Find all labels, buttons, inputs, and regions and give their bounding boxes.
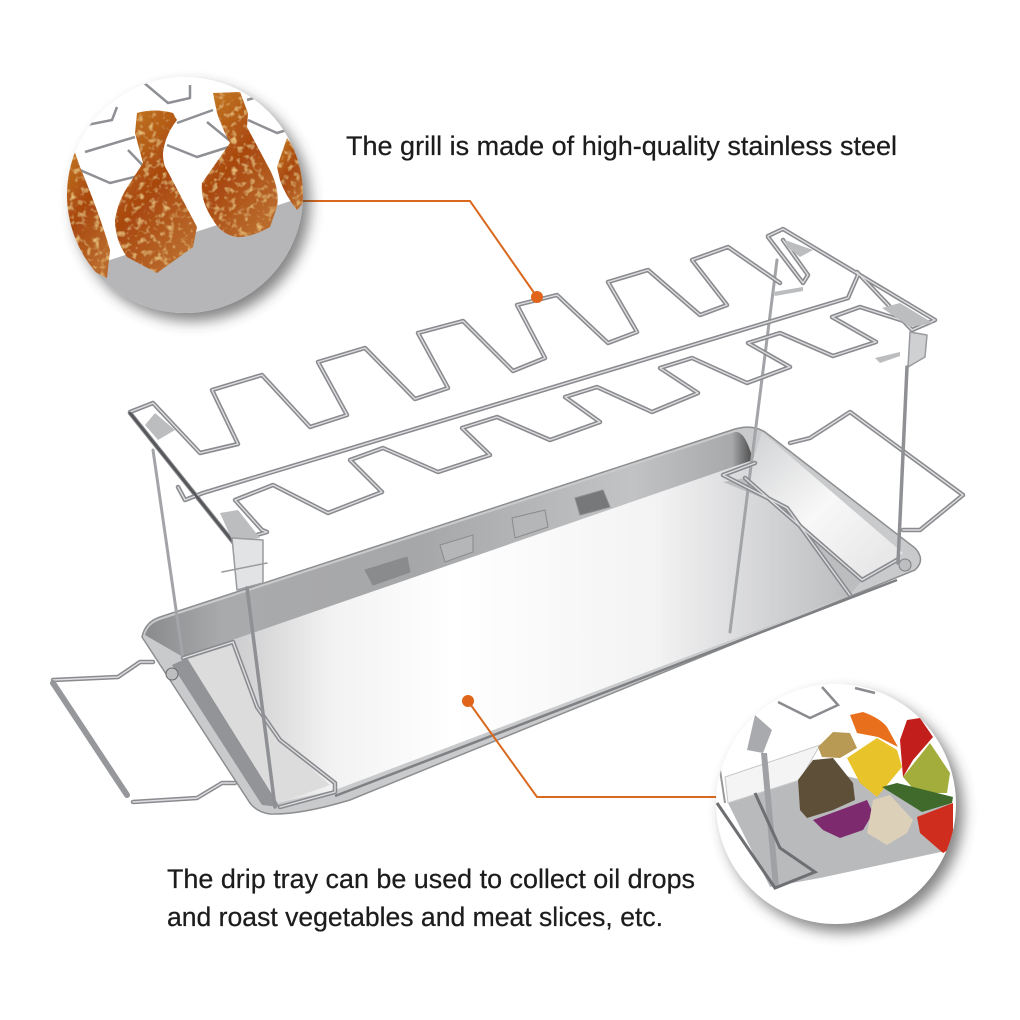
tray front lip — [335, 580, 897, 796]
drip tray — [142, 427, 920, 814]
rear legs — [153, 260, 777, 658]
tray right end bolt — [899, 559, 911, 571]
wire rack — [53, 229, 963, 807]
tray floor — [183, 460, 850, 803]
left reflection — [186, 645, 330, 803]
caption: stainless steel: The grill is made of high-quality stainless steel — [346, 131, 897, 161]
wire highlights — [53, 229, 963, 807]
tray rim — [142, 427, 920, 814]
callout line: drip tray — [462, 695, 716, 797]
wall windows — [365, 490, 610, 585]
left frame dark bar — [130, 413, 233, 542]
callout line: steel grill — [303, 201, 543, 303]
front-left leg bracket — [222, 538, 267, 590]
caption: drip tray: and roast vegetables and meat slices, etc. — [167, 902, 663, 932]
left rail — [172, 658, 280, 807]
left handle bar — [53, 683, 127, 795]
circle inset: chicken legs — [60, 77, 310, 321]
caption: drip tray: The drip tray can be used to collect oil drops — [167, 864, 695, 894]
wire outlines — [53, 229, 963, 807]
plates — [145, 240, 933, 542]
tray end gray band — [723, 478, 862, 595]
circle inset: roasted vegetables — [716, 684, 963, 932]
tray back wall — [145, 432, 753, 657]
caption: drip tray — [167, 864, 695, 932]
tray end wall — [745, 432, 903, 580]
front-right leg bracket — [908, 332, 927, 367]
tray left bolt — [166, 668, 178, 680]
front legs — [247, 367, 907, 807]
